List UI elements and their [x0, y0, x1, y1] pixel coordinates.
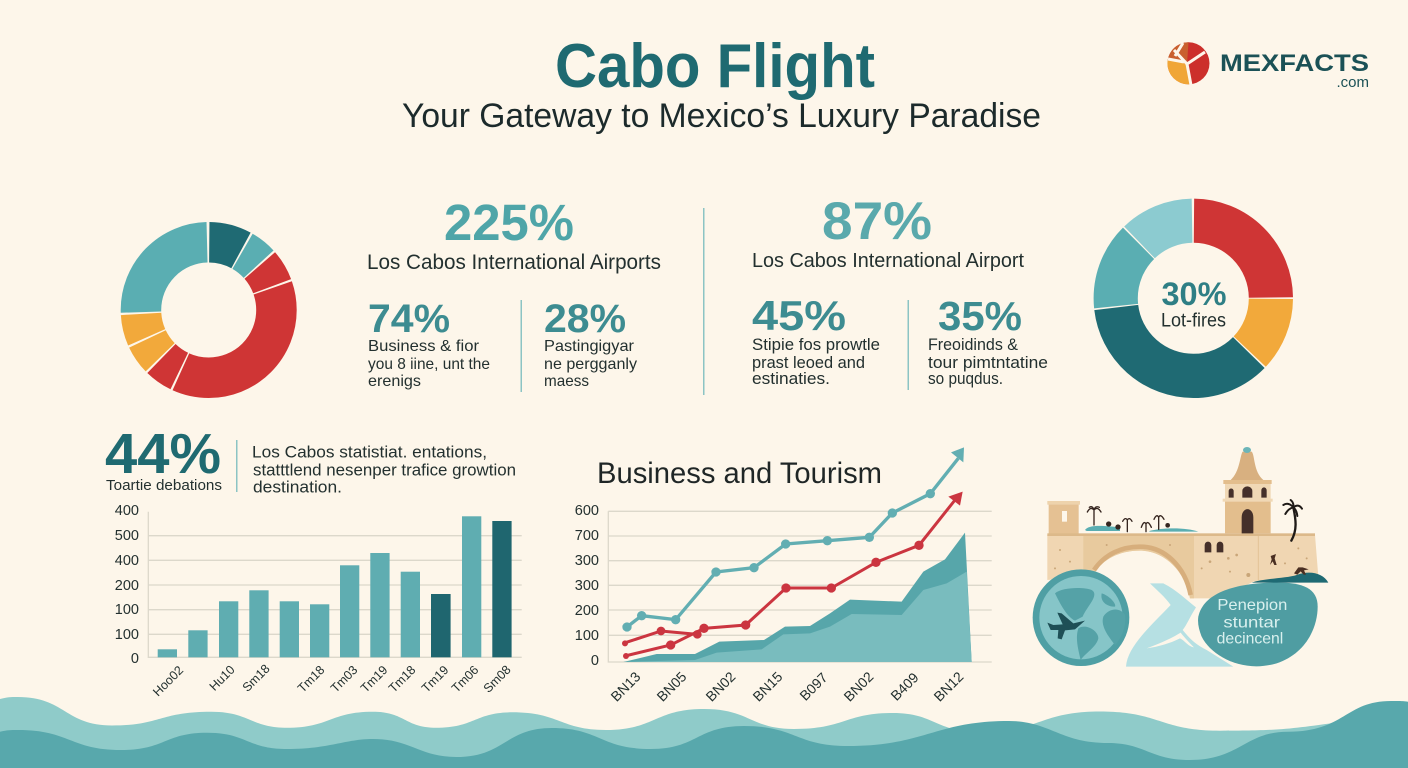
y-axis labels: 400	[115, 553, 139, 569]
chart heading: Business and Tourism	[597, 457, 882, 490]
x-axis labels: Sm18	[240, 662, 273, 695]
speech blob with label: stuntar	[1223, 614, 1281, 631]
y-axis labels: 300	[575, 578, 599, 594]
y-axis labels: 200	[575, 603, 599, 619]
panel: second airport statistics	[752, 192, 1048, 390]
description text: destination.	[253, 478, 342, 496]
stat block: 28%: 28%	[544, 297, 626, 341]
description text	[252, 442, 516, 496]
x-axis labels: BN02	[840, 668, 877, 705]
stat block: 45%: prast leoed and	[752, 354, 865, 372]
donut chart: right	[1116, 221, 1271, 376]
stat block: 74%: Business & fior	[368, 338, 480, 355]
donut centre label: Lot-fires	[1161, 310, 1226, 332]
x-axis labels: Tm06	[449, 663, 481, 695]
waves: footer	[0, 697, 1408, 768]
stat block: 45%: Stipie fos prowtle	[752, 336, 880, 354]
teal line series	[622, 447, 964, 632]
panel: first airport statistics	[367, 194, 661, 392]
stat block: 44%: Toartie debations	[106, 477, 222, 494]
x-axis labels: Hoo02	[150, 663, 186, 699]
y-axis labels	[575, 503, 599, 669]
logo: mexfacts: .com	[1336, 74, 1369, 91]
heading: airports: Los Cabos International Airports	[367, 251, 661, 274]
logo: mexfacts	[1167, 42, 1369, 91]
y-axis labels: 300	[575, 553, 599, 569]
x-axis labels: B097	[796, 669, 831, 704]
donut centre label: 30%	[1162, 276, 1226, 312]
donut chart: left	[141, 242, 276, 378]
stat block: 74%	[368, 297, 490, 390]
y-axis labels: 400	[115, 503, 139, 519]
y-axis labels: 100	[115, 627, 139, 643]
x-axis labels: Hu10	[207, 663, 238, 694]
y-axis labels: 0	[131, 651, 139, 667]
fortress wall and bridge	[1047, 533, 1318, 598]
x-axis labels: Tm19	[419, 663, 451, 695]
stat block: 35%: Freoidinds &	[928, 336, 1018, 354]
x-axis labels: Tm18	[295, 663, 327, 695]
stat block: 45%: estinaties.	[752, 370, 830, 388]
x-axis labels: BN15	[749, 668, 786, 705]
small figures	[1270, 554, 1309, 575]
y-axis labels: 100	[115, 602, 139, 618]
icon: globe with plane	[1033, 569, 1129, 666]
x-axis labels	[150, 662, 514, 699]
x-axis labels: BN13	[607, 668, 644, 705]
stat block: 74%: you 8 iine, unt the	[368, 356, 490, 373]
speech blob with label: Penepion	[1217, 597, 1287, 614]
y-axis labels: 200	[115, 578, 139, 594]
line chart: business and tourism	[575, 447, 992, 705]
x-axis labels: Tm19	[358, 663, 390, 695]
red line series	[622, 492, 963, 659]
dark wave	[0, 701, 1408, 768]
y-axis labels: 600	[575, 503, 599, 519]
stat block: 35%	[928, 293, 1048, 388]
x-axis labels: B409	[887, 669, 922, 704]
bell tower	[1223, 447, 1273, 533]
x-axis labels: Tm18	[386, 663, 418, 695]
light wave	[0, 697, 1340, 768]
speech blob with label	[1198, 573, 1328, 666]
stat: 87%: 87%	[822, 192, 932, 251]
y-axis labels	[115, 503, 139, 667]
palms and garden	[1085, 500, 1302, 541]
stat block: 28%: maess	[544, 373, 589, 390]
bars	[158, 516, 512, 657]
x-axis labels: Sm08	[481, 663, 514, 696]
x-axis labels: BN05	[653, 668, 690, 705]
y-axis labels: 700	[575, 528, 599, 544]
title	[402, 32, 1041, 135]
stat block: 35%: 35%	[938, 293, 1022, 339]
y-axis labels: 0	[591, 653, 599, 669]
x-axis labels	[607, 668, 967, 705]
area series	[623, 533, 972, 662]
stat block: 28%: Pastingigyar	[544, 338, 635, 355]
x-axis labels: BN02	[702, 668, 739, 705]
illustration: cabo landmark with globe	[1033, 447, 1328, 667]
stat block: 74%: erenigs	[368, 373, 421, 390]
stat block: 35%: so puqdus.	[928, 370, 1003, 388]
y-axis labels: 100	[575, 628, 599, 644]
donut centre label	[1161, 276, 1226, 332]
title: Cabo Flight	[555, 32, 875, 101]
x-axis labels: Tm03	[328, 663, 360, 695]
stat block: 35%: tour pimtntatine	[928, 354, 1048, 372]
speech blob with label: decincenl	[1217, 630, 1283, 647]
stat block: 44%: 44%	[105, 422, 221, 486]
stat: 225%: 225%	[444, 194, 574, 251]
stat block: 45%	[752, 292, 880, 388]
description text: Los Cabos statistiat. entations,	[252, 442, 487, 462]
stat block: 44%	[105, 422, 516, 496]
stat block: 28%	[544, 297, 637, 390]
x-axis labels: BN12	[930, 668, 967, 705]
logo: mexfacts: MEXFACTS	[1220, 50, 1369, 77]
title: Your Gateway to Mexico’s Luxury Paradise	[402, 97, 1041, 135]
stat block: 45%: 45%	[752, 292, 846, 339]
icon: logo mark	[1167, 42, 1210, 85]
stat block: 28%: ne pergganly	[544, 356, 637, 373]
y-axis labels: 500	[115, 528, 139, 544]
stat block: 74%: 74%	[368, 297, 450, 341]
description text: statttlend nesenper trafice growtion	[253, 460, 516, 480]
river	[1126, 583, 1233, 667]
heading: airport: Los Cabos International Airport	[752, 250, 1024, 272]
left tower	[1047, 501, 1080, 534]
bar chart	[115, 503, 522, 699]
